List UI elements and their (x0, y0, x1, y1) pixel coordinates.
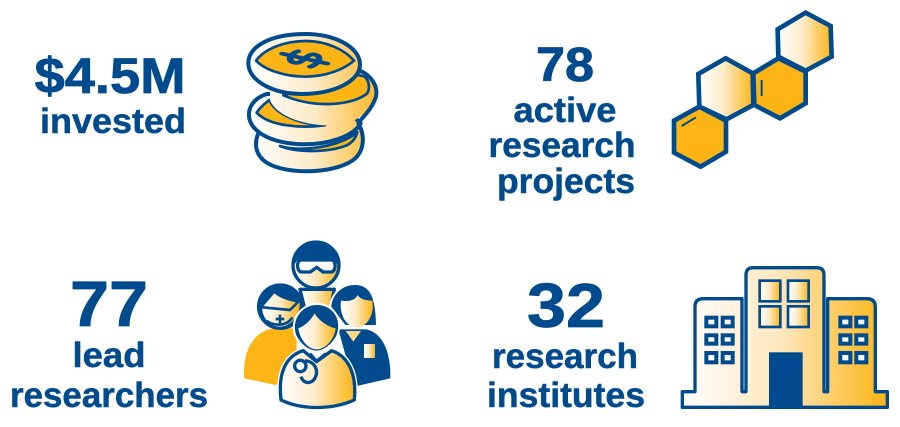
stat: 78 active research projects (488, 39, 636, 201)
label: active research projects (488, 91, 636, 201)
number: $4.5M: $4.5M (34, 48, 186, 104)
left windows (706, 318, 733, 362)
person: surgical mask (258, 285, 302, 329)
icon: hexagon molecule (674, 13, 832, 167)
badge (364, 344, 375, 358)
icon: team of researchers (244, 242, 390, 407)
person: goggles (293, 242, 339, 310)
person: dark hair (330, 284, 377, 342)
stat: 32 research institutes (487, 272, 645, 415)
icon detail: dollar sign (278, 48, 331, 69)
label: research institutes: research (492, 337, 638, 376)
stat: $4.5M invested (34, 48, 186, 141)
right windows (840, 318, 866, 362)
label: lead researchers: researchers (10, 376, 208, 415)
number: 32: 32 (527, 272, 605, 341)
label: lead researchers: lead (72, 336, 146, 375)
number: 77: 77 (70, 268, 148, 340)
person: yellow body (244, 328, 297, 385)
label: active research projects: active (514, 91, 616, 130)
stat: 77 lead researchers (10, 268, 208, 415)
icon: stack of coins (248, 34, 376, 171)
number: 78: 78 (536, 39, 594, 92)
label: research institutes: institutes (487, 376, 645, 415)
large windows (760, 281, 809, 327)
person: doctor with stethoscope (280, 304, 355, 407)
label: active research projects: projects (497, 162, 635, 201)
building body (682, 268, 887, 407)
label: active research projects: research (488, 126, 636, 165)
label: invested: invested (40, 102, 186, 141)
door (769, 352, 803, 407)
person: navy body (338, 329, 390, 386)
icon: hospital building (682, 268, 887, 407)
label: research institutes (487, 337, 645, 415)
label: lead researchers (10, 336, 208, 415)
